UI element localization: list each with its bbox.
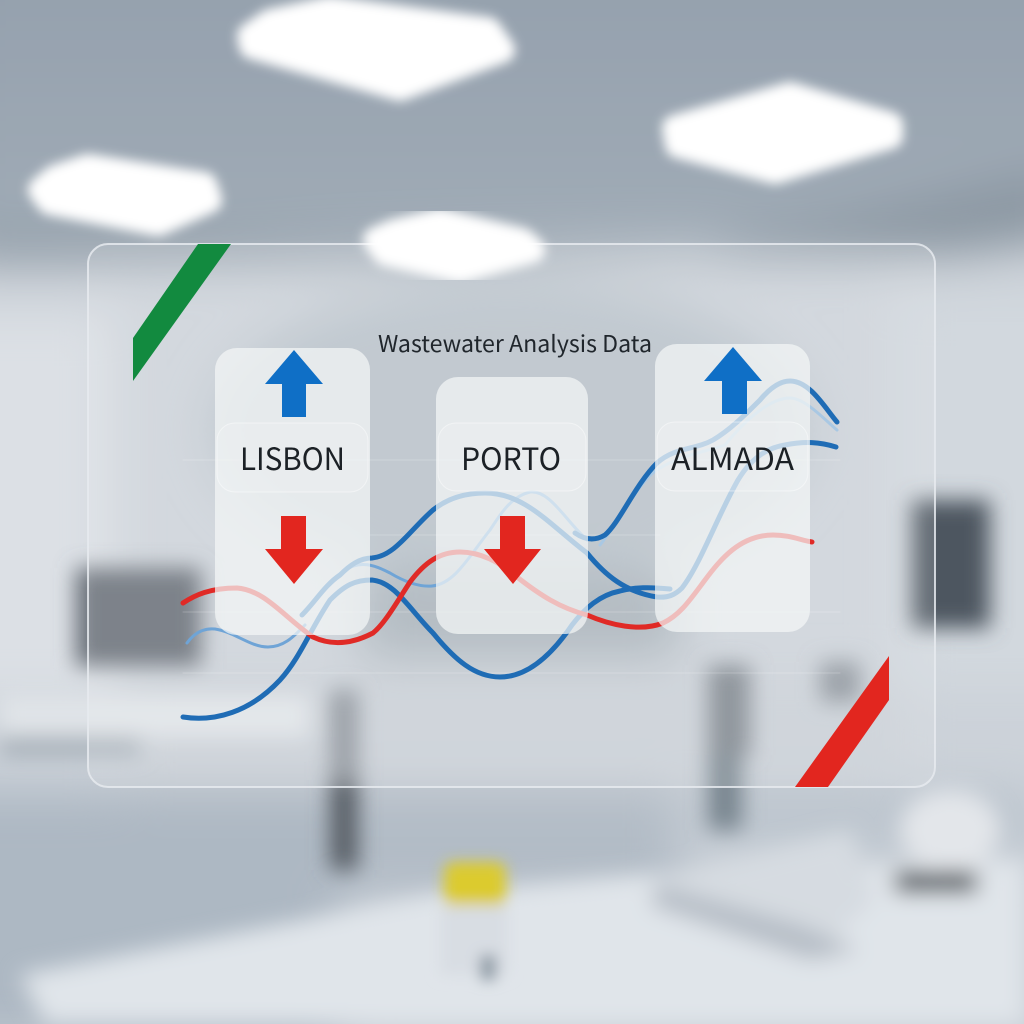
label: Porto: PORTO <box>461 434 561 479</box>
title: Wastewater Analysis Data <box>378 325 652 359</box>
ceiling lights <box>41 9 890 223</box>
label: Lisbon <box>217 423 368 492</box>
icon: blue up arrow <box>265 350 323 417</box>
label: Lisbon: LISBON <box>240 434 345 479</box>
line chart behind cards <box>183 381 840 718</box>
icon: red down arrow <box>265 516 323 584</box>
label: Almada: ALMADA <box>671 434 794 479</box>
ceiling light seen through panel <box>376 221 532 270</box>
glass panel <box>88 221 935 787</box>
card: Porto <box>436 377 588 634</box>
icon: red down arrow <box>484 516 541 584</box>
icon: blue up arrow <box>704 347 762 414</box>
corner accent: red <box>795 656 889 787</box>
card: Almada <box>655 344 810 632</box>
label: Almada <box>657 422 808 491</box>
label: Porto <box>438 423 586 491</box>
card: Lisbon <box>215 348 370 635</box>
corner accent: green <box>133 244 231 381</box>
